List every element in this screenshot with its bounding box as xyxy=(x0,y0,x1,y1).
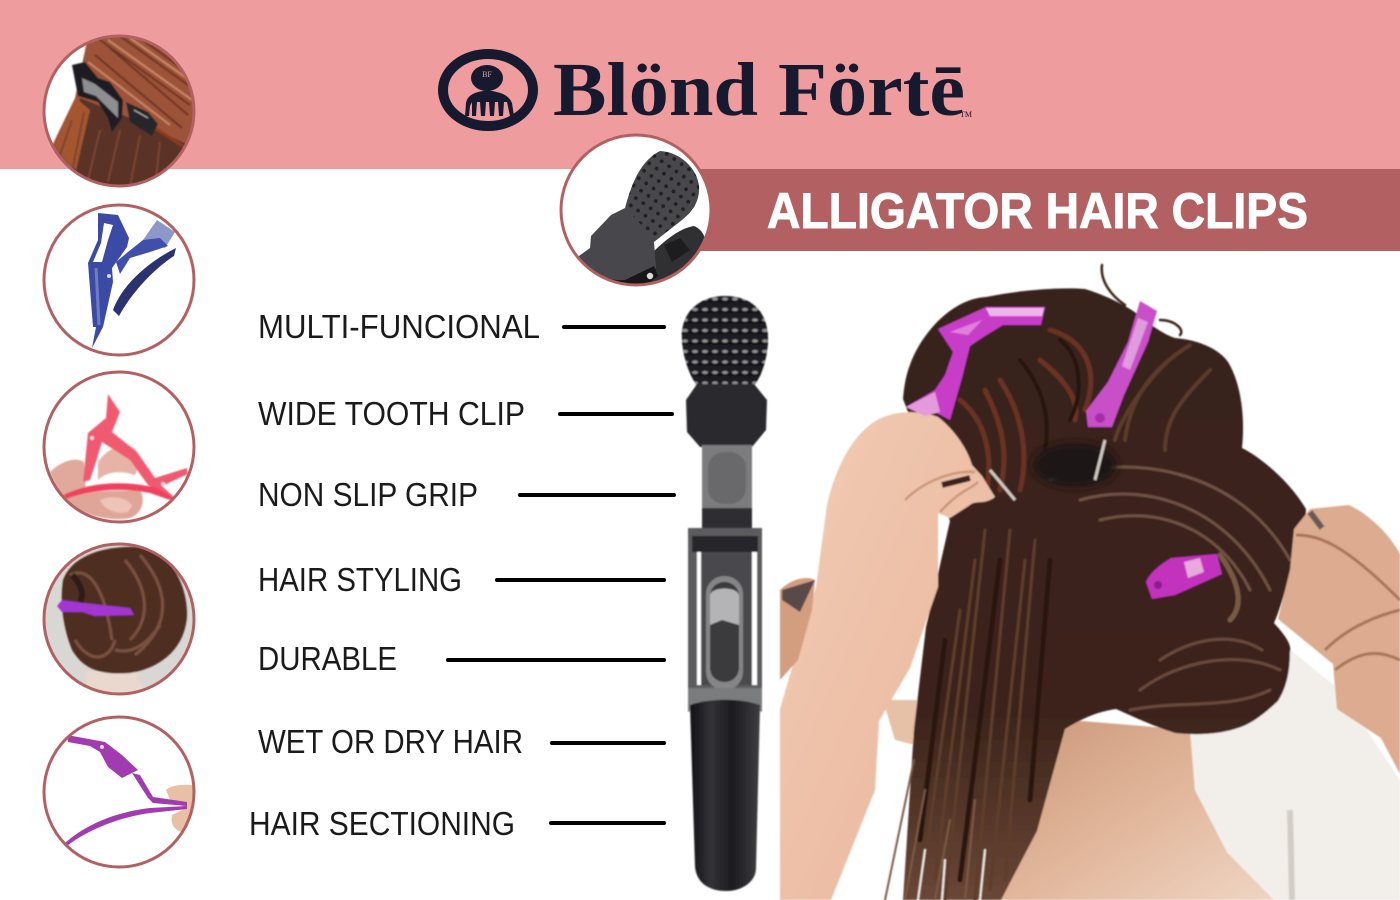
product: black alligator clip, front view xyxy=(680,296,770,891)
icon: comb emblem xyxy=(443,54,533,126)
label: hair styling: HAIR STYLING xyxy=(258,561,462,598)
title band: ALLIGATOR HAIR CLIPS xyxy=(767,183,1308,239)
title band xyxy=(680,169,1400,251)
feature labels with leader lines xyxy=(249,308,674,842)
circle: blue clip xyxy=(44,205,194,355)
photo: woman having hair sectioned with purple clips xyxy=(780,265,1400,900)
label: wide tooth clip: WIDE TOOTH CLIP xyxy=(258,395,525,432)
purple clip: side xyxy=(1146,554,1222,599)
circle: purple clip xyxy=(44,717,195,867)
purple clip: top right xyxy=(1086,301,1157,427)
label: durable: DURABLE xyxy=(258,640,397,677)
label: multi-funcional: MULTI-FUNCIONAL xyxy=(258,308,540,345)
circle: pink clip in hand xyxy=(44,372,194,522)
hair parts xyxy=(990,440,1105,500)
product circle: clip close-up xyxy=(561,135,711,297)
logo: Blond Forte: Blönd Förtē xyxy=(553,48,965,132)
circle: brown updo with purple clip xyxy=(44,544,194,700)
header background xyxy=(0,0,1400,169)
logo: Blond Forte: TM xyxy=(960,110,972,119)
label: hair sectioning: HAIR SECTIONING xyxy=(249,805,515,842)
ear and jaw skin xyxy=(883,700,925,745)
hair mass xyxy=(903,288,1306,900)
other left hand fragment xyxy=(780,578,815,680)
label: wet or dry hair: WET OR DRY HAIR xyxy=(258,723,523,760)
right hand xyxy=(1278,505,1400,774)
label: non slip grip: NON SLIP GRIP xyxy=(258,476,478,513)
purple clip: top left xyxy=(906,307,1045,420)
dark scalp area xyxy=(1033,443,1117,487)
left hand and arm xyxy=(780,412,995,900)
hair strands xyxy=(885,265,1290,900)
circle: clip in red hair xyxy=(44,36,195,190)
icon: comb emblem: BF xyxy=(482,70,492,79)
white shirt xyxy=(1190,640,1400,900)
neck xyxy=(985,715,1274,900)
